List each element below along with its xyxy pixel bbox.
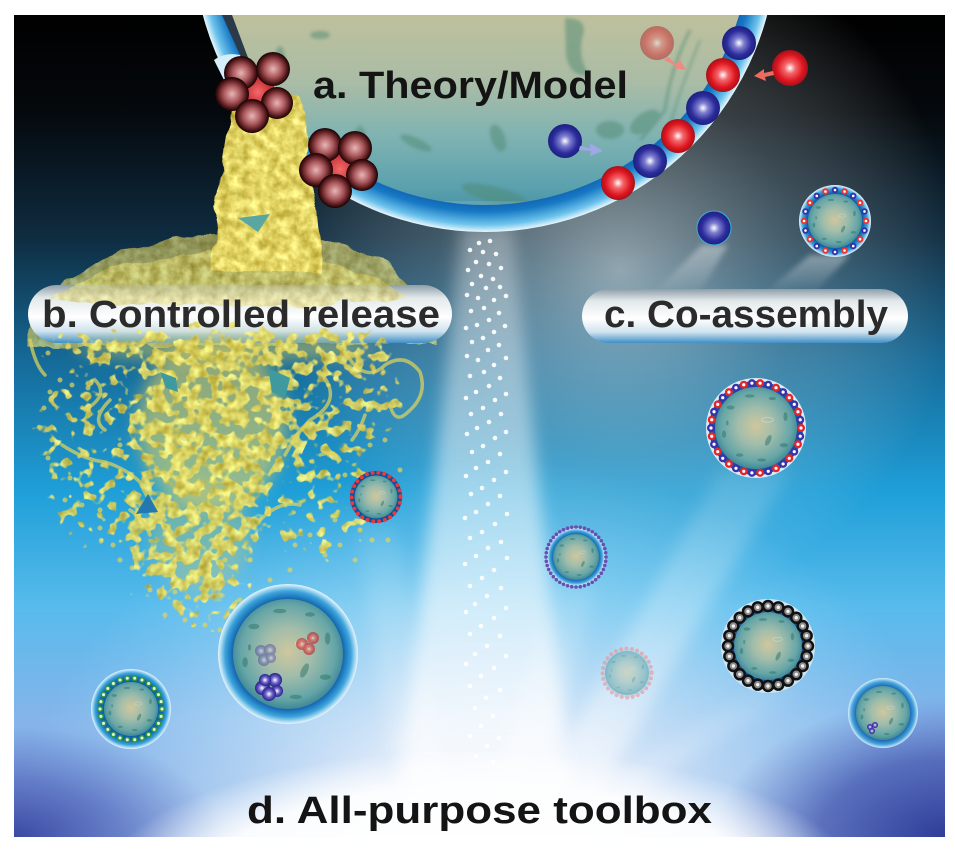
sphere with green beads [91, 669, 171, 749]
pill: c. Co-assembly [582, 289, 908, 343]
pill: b. Controlled release [28, 285, 452, 343]
central beam [400, 225, 570, 790]
shards in splash [136, 368, 290, 514]
cluster 1 red particles [215, 52, 293, 133]
sphere with black beads [721, 599, 815, 693]
falling white dots [465, 241, 507, 762]
pale purple cluster [255, 644, 276, 666]
yellow tubes and droplets [30, 340, 422, 630]
pink cluster [296, 632, 319, 655]
yellow droplets [30, 321, 415, 636]
sphere with purple coating [546, 527, 606, 587]
big sphere with clusters [218, 584, 358, 724]
yellow splash over pill [50, 248, 410, 306]
violet cluster [255, 673, 283, 701]
label c text: c. Co-assembly [604, 294, 888, 336]
yellow stream column [210, 95, 322, 272]
pale sphere with pink beads [602, 648, 652, 698]
cluster 2 red particles [299, 128, 378, 208]
label b text: b. Controlled release [42, 294, 440, 336]
sphere with red beads [350, 471, 402, 523]
sphere surface texture [275, 18, 700, 221]
dense splash core [75, 336, 375, 590]
free beads and arrows [548, 26, 808, 245]
light beams [355, 245, 850, 790]
title a. Theory/Model: a. Theory/Model [313, 65, 628, 107]
large sphere: theory/model [193, 0, 777, 232]
sphere with red and blue beads [706, 378, 806, 478]
label d. All-purpose toolbox: d. All-purpose toolbox [247, 790, 712, 832]
yellow splash dome behind pill [24, 234, 436, 345]
bead-coated sphere top right [799, 185, 871, 257]
tiny violet cluster [867, 722, 878, 734]
beads on sphere membrane [601, 26, 756, 200]
small sphere bottom right [848, 678, 918, 748]
teal shard [238, 214, 270, 232]
